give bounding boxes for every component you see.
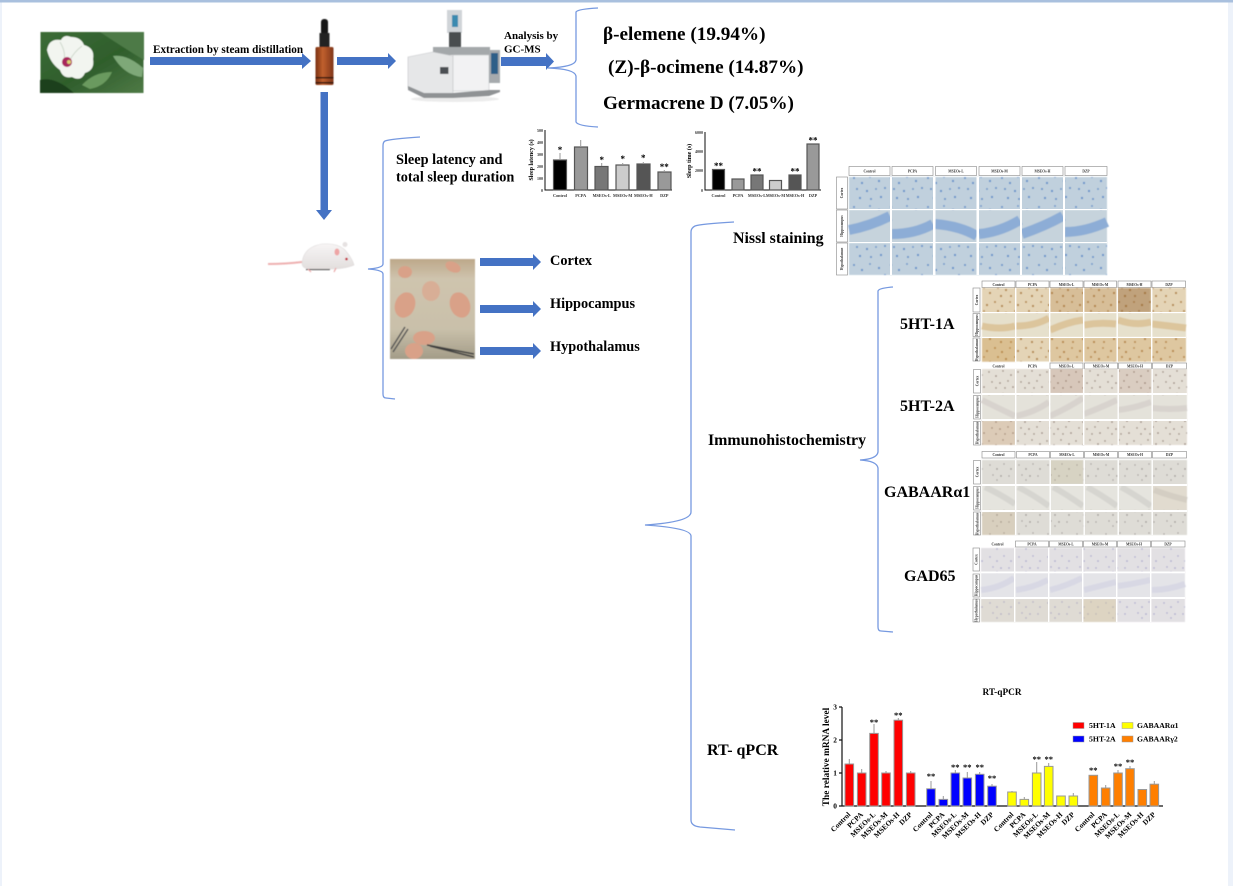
x axis group labels: MSEOs-H (953, 810, 983, 840)
legend (1073, 721, 1179, 744)
chart: sleep latency: PCPA (575, 193, 586, 198)
label: GAD65: GAD65 (904, 568, 956, 585)
chart: sleep time: PCPA (733, 193, 743, 198)
5HT-1A column headers: DZP (1165, 283, 1173, 287)
label: hypothalamus: Hypothalamus (550, 339, 640, 355)
chart: sleep time: 0 (701, 188, 703, 193)
GAD65 column headers: MSEOs-M (1092, 542, 1109, 546)
5HT-2A column headers: MSEOs-L (1059, 365, 1075, 369)
y axis title: The relative mRNA level (822, 707, 832, 806)
brace: brain and behaviour (368, 137, 420, 399)
label: 5HT-2A: 5HT-2A (900, 398, 955, 415)
chart: sleep latency: 400 (537, 140, 543, 145)
5HT-2A column headers (982, 363, 1186, 369)
arrow: bottle to mouse (316, 92, 332, 220)
chart: sleep latency: Control (553, 193, 568, 198)
GAD65 row labels: Hypothalamus (974, 599, 978, 622)
legend: 5HT-1A (1089, 721, 1116, 730)
chart: sleep time: ** (790, 166, 800, 176)
5HT-2A column headers: Control (993, 365, 1004, 369)
GAD65 column headers: Control (992, 542, 1003, 546)
arrow: bottle to GC-MS (337, 53, 396, 69)
x axis group labels: Control (829, 810, 852, 834)
significance stars: ** (1114, 761, 1122, 771)
significance stars: ** (894, 710, 903, 720)
GABAAR image grid (982, 460, 1187, 535)
bars: GABAAR gamma2 (1089, 769, 1159, 806)
significance stars: ** (1126, 757, 1134, 767)
chart: sleep time: ** (752, 166, 762, 176)
label: 5HT-1A: 5HT-1A (900, 316, 955, 333)
chart: sleep latency: * (558, 145, 563, 155)
x axis group labels: DZP (897, 810, 914, 827)
GABAAR column headers: MSEOs-L (1059, 453, 1075, 457)
chart: sleep time: 2000 (695, 168, 703, 173)
x axis group labels: MSEOs-H (1035, 810, 1065, 840)
panel: GABAAR alpha1 micrographs (974, 452, 1187, 535)
chart: sleep latency: * (599, 155, 604, 165)
5HT-2A column headers: MSEOs-H (1127, 365, 1143, 369)
GAD65 column headers: DZP (1164, 542, 1172, 546)
GABAAR row labels (974, 460, 980, 535)
significance stars: ** (1044, 754, 1053, 764)
label: hippocampus: Hippocampus (550, 296, 635, 312)
icon: GC-MS instrument (408, 10, 500, 102)
5HT-2A image grid (982, 369, 1187, 445)
Nissl row labels (836, 177, 848, 275)
x axis group labels: DZP (979, 810, 996, 827)
compound: beta-elemene: β-elemene (19.94%) (603, 24, 766, 45)
GABAAR column headers: PCPA (1028, 453, 1038, 457)
chart: sleep latency: DZP (660, 193, 669, 198)
significance stars: ** (1089, 765, 1098, 775)
error bars (849, 718, 1154, 799)
chart: sleep time: MSEOs-M (766, 193, 785, 198)
x axis group labels: MSEOs-H (872, 810, 902, 840)
GAD65 image grid (981, 548, 1185, 622)
legend: GABAARγ2 (1137, 734, 1178, 744)
panel: 5HT-1A micrographs (973, 281, 1186, 362)
y axis title: sleep latency: Sleep latency (s) (528, 139, 535, 181)
GAD65 column headers: PCPA (1027, 542, 1037, 546)
chart: sleep time: Control (712, 193, 726, 198)
chart: RT-qPCR relative mRNA level: 1 (833, 768, 837, 778)
chart: sleep latency: 500 (537, 128, 543, 133)
5HT-2A row labels: Hypothalamus (976, 421, 980, 444)
chart: sleep time: 4000 (695, 149, 703, 154)
x axis group labels: MSEOs-L (929, 810, 958, 839)
GABAAR column headers: MSEOs-M (1093, 453, 1110, 457)
icon: white mouse (268, 242, 354, 272)
GABAAR column headers (982, 452, 1186, 458)
label: immunohistochemistry: Immunohistochemistry (708, 432, 866, 449)
y axis title: sleep time: Sleep time (s) (686, 144, 693, 178)
5HT-2A row labels: Hippocampus (976, 396, 980, 418)
GAD65 column headers (981, 541, 1185, 547)
significance stars: ** (951, 762, 960, 772)
heading: sleep latency and total sleep duration: Sleep latency and (396, 152, 502, 168)
x axis group labels: PCPA (1089, 810, 1109, 830)
chart: RT-qPCR relative mRNA level: 0 (833, 802, 837, 810)
Nissl column headers: MSEOs-M (991, 170, 1008, 174)
GAD65 row labels: Hippocampus (974, 574, 978, 596)
5HT-2A column headers: MSEOs-M (1093, 365, 1110, 369)
x axis group labels: MSEOs-H (1116, 810, 1146, 840)
label: extraction by steam distillation: Extraction by steam distillation (153, 44, 304, 56)
GABAAR row labels: Cortex (976, 467, 980, 477)
legend: 5HT-2A (1089, 734, 1116, 744)
chart: sleep time: 6000 (695, 130, 703, 135)
Nissl row labels: Hippocampus (840, 215, 844, 237)
chart: sleep latency: 300 (537, 152, 543, 157)
Nissl column headers: MSEOs-L (948, 170, 964, 174)
brace: assays (645, 222, 735, 830)
chart: sleep latency: MSEOs-L (593, 193, 611, 198)
label: analysis by GC-MS: Analysis by (504, 30, 559, 42)
chart: sleep latency: 100 (537, 176, 543, 181)
x axis group labels: Control (1073, 810, 1096, 834)
chart: sleep time: ** (714, 161, 724, 171)
photo: dissected brain tissue (390, 259, 475, 359)
Nissl column headers: PCPA (908, 170, 918, 174)
5HT-2A row labels: Cortex (976, 376, 980, 386)
Nissl row labels: Cortex (840, 188, 844, 198)
x axis group labels: DZP (1060, 810, 1077, 827)
x axis group labels: MSEOs-M (1103, 810, 1133, 841)
5HT-1A column headers: PCPA (1028, 283, 1038, 287)
chart: sleep latency (528, 128, 672, 198)
5HT-1A row labels: Hippocampus (975, 314, 979, 336)
significance stars: ** (1032, 754, 1041, 764)
5HT-1A column headers: Control (993, 283, 1004, 287)
legend: GABAARα1 (1137, 721, 1179, 730)
heading: sleep latency and total sleep duration: total sleep duration (396, 170, 514, 186)
5HT-1A row labels: Cortex (975, 295, 979, 305)
GAD65 row labels: Cortex (974, 554, 978, 565)
chart: sleep time: MSEOs-H (786, 193, 805, 198)
chart: sleep time: DZP (809, 193, 818, 198)
chart: sleep latency: 0 (541, 188, 543, 193)
chart: sleep latency: 200 (537, 164, 543, 169)
x axis group labels: MSEOs-M (940, 810, 970, 841)
label: cortex: Cortex (550, 253, 593, 269)
chart: sleep latency: MSEOs-M (613, 193, 632, 198)
bars: 5HT-1A (845, 720, 915, 806)
x axis group labels: MSEOs-M (859, 810, 889, 841)
x axis group labels: PCPA (845, 810, 865, 830)
5HT-1A column headers (982, 281, 1186, 288)
label: RT-qPCR: RT- qPCR (707, 742, 779, 759)
chart: sleep latency: * (641, 153, 646, 163)
chart: sleep time: MSEOs-L (748, 193, 766, 198)
Nissl image grid (849, 177, 1107, 275)
5HT-1A row labels (973, 288, 980, 361)
GABAAR column headers: MSEOs-H (1127, 453, 1143, 457)
brace: compounds (548, 8, 598, 127)
5HT-2A column headers: PCPA (1028, 365, 1038, 369)
compound: Z-beta-ocimene: (Z)-β-ocimene (14.87%) (608, 57, 804, 78)
Nissl column headers: Control (864, 170, 875, 174)
Nissl column headers: MSEOs-H (1035, 170, 1051, 174)
Nissl column headers: DZP (1082, 170, 1090, 174)
Nissl column headers (849, 166, 1107, 176)
chart: sleep time: ** (808, 136, 818, 146)
chart: sleep latency: * (620, 154, 625, 164)
x axis group labels: Control (992, 810, 1015, 834)
x axis group labels: MSEOs-L (848, 810, 877, 839)
5HT-1A column headers: MSEOs-H (1127, 283, 1143, 287)
x axis group labels (829, 810, 1158, 841)
significance stars: ** (870, 717, 878, 727)
5HT-2A column headers: DZP (1166, 365, 1174, 369)
brace: IHC markers (860, 287, 893, 632)
significance stars: ** (927, 771, 935, 781)
label: GABAAR alpha1: GABAARα1 (884, 484, 970, 501)
GABAAR row labels: Hypothalamus (976, 512, 980, 535)
arrow: to hippocampus (480, 301, 541, 317)
chart: RT-qPCR relative mRNA level: 2 (833, 736, 837, 744)
GABAAR row labels: Hippocampus (976, 487, 980, 509)
x axis group labels: PCPA (1008, 810, 1028, 830)
x axis group labels: MSEOs-M (1021, 810, 1052, 841)
5HT-1A row labels: Hypothalamus (975, 338, 979, 361)
panel: GAD65 micrographs (973, 541, 1185, 622)
chart: RT-qPCR relative mRNA level: 3 (833, 702, 837, 712)
5HT-2A row labels (974, 370, 980, 445)
bars: GABAAR alpha1 (1008, 766, 1078, 806)
panel: Nissl staining micrographs (836, 166, 1107, 275)
chart: sleep time (686, 130, 821, 198)
label: analysis by GC-MS: GC-MS (504, 44, 541, 56)
panel: 5HT-2A micrographs (974, 363, 1187, 445)
x axis group labels: PCPA (927, 810, 947, 830)
significance stars: ** (975, 762, 984, 772)
significance stars: ** (963, 762, 972, 772)
Nissl row labels: Hypothalamus (840, 247, 844, 270)
chart: RT-qPCR relative mRNA level (822, 688, 1179, 841)
arrow: extraction (150, 53, 311, 69)
x axis group labels: DZP (1141, 810, 1158, 827)
x axis group labels: Control (911, 810, 934, 834)
chart title: RT-qPCR (982, 688, 1022, 698)
GAD65 column headers: MSEOs-L (1058, 542, 1074, 546)
5HT-1A column headers: MSEOs-L (1059, 283, 1075, 287)
photo: white magnolia flower (40, 32, 144, 93)
arrow: GC-MS to compounds (501, 53, 554, 70)
chart: sleep latency: ** (660, 162, 669, 172)
GABAAR column headers: DZP (1166, 453, 1174, 457)
latency bars (554, 147, 671, 190)
compound list (603, 24, 804, 114)
label: Nissl staining: Nissl staining (733, 230, 824, 247)
GABAAR column headers: Control (993, 453, 1004, 457)
5HT-1A image grid (982, 288, 1186, 362)
x axis group labels: MSEOs-L (1092, 810, 1121, 839)
x axis group labels: MSEOs-L (1011, 810, 1040, 839)
sleep time bars (712, 144, 819, 190)
arrow: to cortex (480, 254, 541, 270)
5HT-1A column headers: MSEOs-M (1092, 283, 1109, 287)
bars: 5HT-2A (927, 773, 996, 806)
arrow: to hypothalamus (480, 343, 541, 359)
compound: germacrene D: Germacrene D (7.05%) (603, 93, 794, 114)
significance stars (870, 710, 1134, 783)
significance stars: ** (988, 773, 996, 783)
GAD65 row labels (973, 548, 980, 622)
GAD65 column headers: MSEOs-H (1126, 542, 1142, 546)
chart: sleep latency: MSEOs-H (634, 193, 653, 198)
icon: essential oil bottle (316, 19, 334, 85)
